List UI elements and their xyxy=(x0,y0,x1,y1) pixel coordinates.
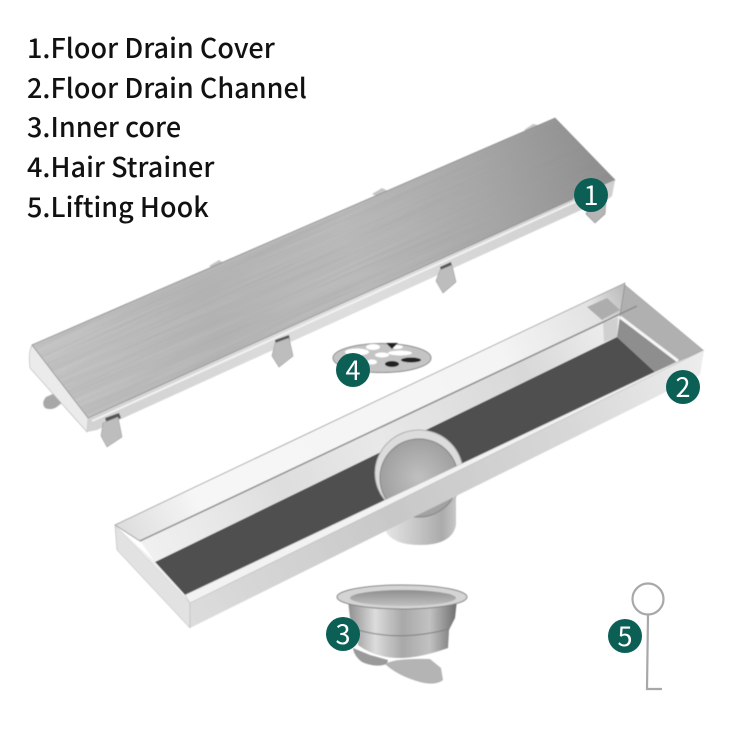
title list: parts legend: 2.Floor Drain Channel xyxy=(27,67,307,106)
badge 5: 5 xyxy=(618,615,632,654)
lifting hook xyxy=(632,584,664,689)
badge 4: 4 xyxy=(346,349,360,388)
far wall xyxy=(115,283,625,541)
badge 5 xyxy=(608,615,642,654)
drain hole xyxy=(375,430,463,517)
clips xyxy=(101,200,606,447)
outer lower side xyxy=(115,350,704,628)
drain pipe xyxy=(385,475,456,545)
badge 4 xyxy=(336,349,370,388)
badge 1 xyxy=(574,174,608,213)
title list: parts legend: 4.Hair Strainer xyxy=(27,146,215,185)
badge 3 xyxy=(326,613,360,652)
badge 1: 1 xyxy=(584,174,598,213)
front rim xyxy=(185,350,704,603)
floor drain channel xyxy=(115,283,704,628)
far right corner xyxy=(587,298,620,320)
channel floor xyxy=(155,337,655,595)
hair strainer xyxy=(333,343,431,372)
badge 2 xyxy=(666,366,700,405)
title list: parts legend: 5.Lifting Hook xyxy=(27,186,209,225)
inner core xyxy=(337,585,467,684)
badge 3: 3 xyxy=(336,613,350,652)
floor drain cover xyxy=(28,117,616,448)
badge 2: 2 xyxy=(676,366,690,405)
title list: parts legend: 3.Inner core xyxy=(27,106,181,145)
title list: parts legend: 1.Floor Drain Cover xyxy=(27,27,276,66)
title list: parts legend xyxy=(27,27,307,225)
